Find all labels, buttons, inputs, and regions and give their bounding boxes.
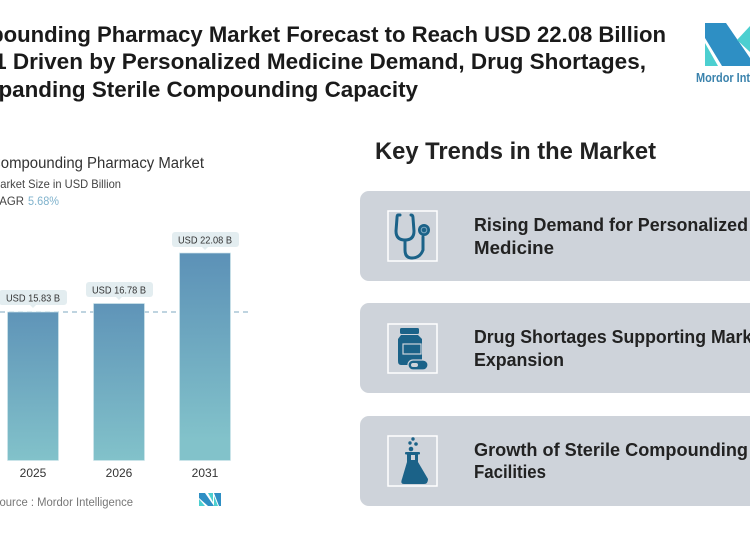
value label 2025 xyxy=(0,290,67,308)
icon: flask xyxy=(388,436,437,486)
chart heading: 5.68% xyxy=(28,194,59,208)
title xyxy=(0,22,666,102)
value label 2031 xyxy=(172,232,239,250)
bar 2031 xyxy=(180,253,230,460)
year axis labels: 2031 xyxy=(192,466,219,480)
panel: drug shortages: Expansion xyxy=(474,350,564,370)
value label 2025: USD 15.83 B xyxy=(6,292,60,304)
panel: sterile compounding xyxy=(360,416,750,506)
panel: sterile compounding: Facilities xyxy=(474,462,546,482)
value label 2026: USD 16.78 B xyxy=(92,284,146,296)
chart heading xyxy=(0,155,205,208)
bar 2026 xyxy=(94,304,144,460)
icon: medicine bottle xyxy=(388,324,437,373)
value label 2031: USD 22.08 B xyxy=(178,234,232,246)
bar chart xyxy=(0,232,250,480)
reference dashed line xyxy=(0,311,250,313)
icon: stethoscope xyxy=(388,211,437,261)
value label 2026 xyxy=(86,282,153,300)
trend text: Rising Demand for Personalized xyxy=(474,215,748,235)
panel: personalized medicine xyxy=(360,191,750,281)
year axis labels: 2025 xyxy=(20,466,47,480)
year axis labels: 2026 xyxy=(106,466,133,480)
trend text: Growth of Sterile Compounding xyxy=(474,440,748,460)
panel: personalized medicine: Medicine xyxy=(474,238,554,258)
logo: Mordor Intelligence xyxy=(696,23,750,85)
bar 2025 xyxy=(8,312,58,460)
small logo xyxy=(199,493,221,506)
section heading: Key Trends in the Market xyxy=(375,138,656,165)
year axis labels xyxy=(20,466,219,480)
panel: drug shortages xyxy=(360,303,750,393)
